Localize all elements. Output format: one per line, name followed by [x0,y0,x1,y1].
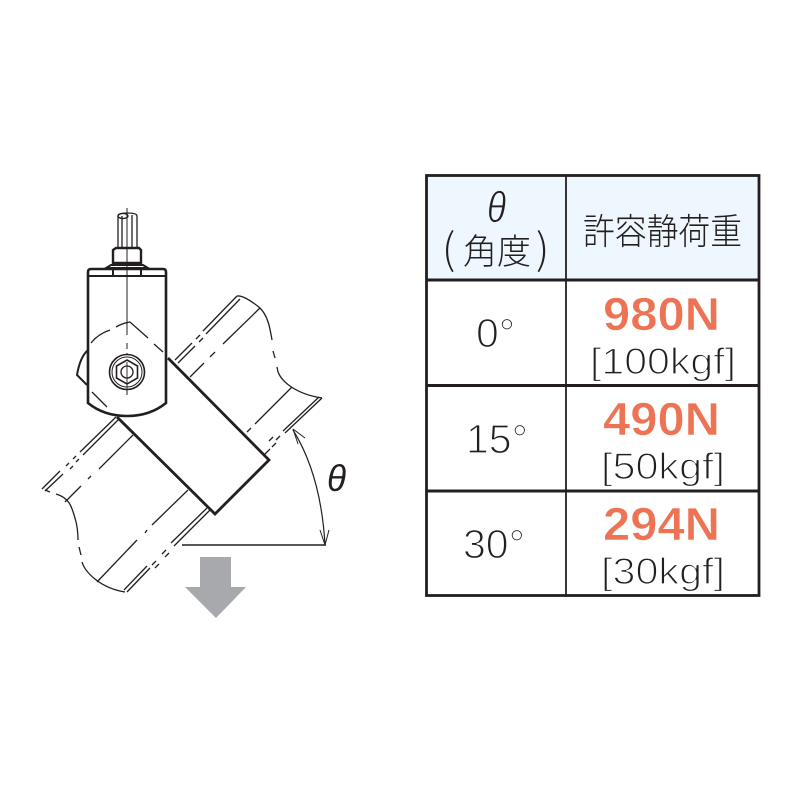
header: angle: ( [442,216,455,277]
body flange line [88,269,166,276]
hex nut [113,248,141,264]
row 30 degrees load: 294N [603,498,720,550]
threaded stud [118,213,137,248]
lower left pipe [42,417,210,592]
centre line [126,208,128,395]
row 15 degrees angle: 15° [466,416,528,462]
upper right pipe [175,296,322,454]
washer [106,265,148,268]
column divider [565,175,567,596]
header: angle: ) [536,216,549,277]
angle dimension [182,429,329,545]
row 0 degrees load: 980N [603,288,720,340]
grid lines [426,280,759,491]
header: theta: θ [487,183,506,232]
clamp sleeve [117,357,269,514]
table: allowable static load [426,175,759,596]
row 30 degrees angle: 30° [463,521,525,567]
header: angle: 角度 [463,224,531,275]
hidden outline [91,322,163,407]
left tab [77,350,88,385]
clamp sleeve outline [117,358,269,514]
row 0 degrees angle: 0° [476,310,515,356]
table border [426,176,759,596]
down arrow [185,557,246,618]
header background [426,175,759,280]
clamp body [88,269,166,416]
theta label: θ [327,458,346,499]
row 30 degrees kgf: [30kgf] [601,551,725,592]
diagram: clamp on inclined pipe [42,208,346,618]
header: allowable static load: 許容静荷重 [583,203,742,255]
row 15 degrees load: 490N [603,393,720,445]
bolt head [110,354,144,395]
row 15 degrees kgf: [50kgf] [601,446,725,487]
row 0 degrees kgf: [100kgf] [590,341,736,382]
